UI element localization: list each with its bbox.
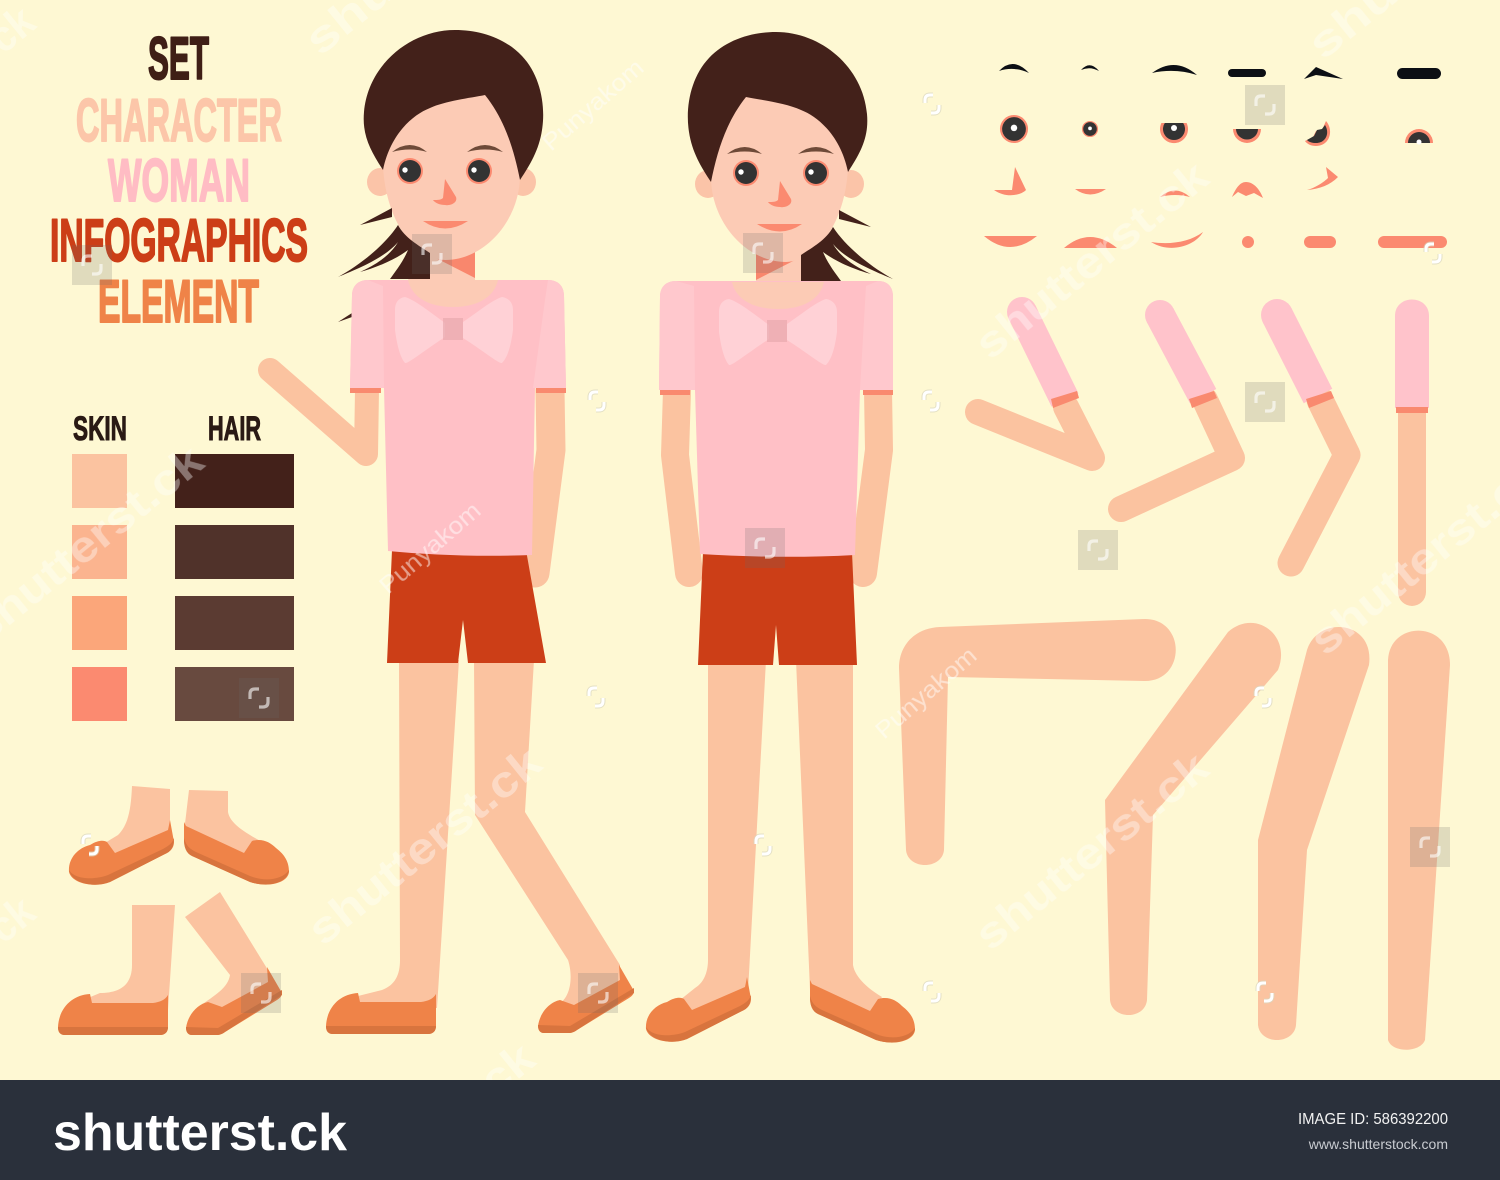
leg part diagonal (1105, 623, 1281, 1015)
face (392, 145, 503, 228)
title: INFOGRAPHICS (50, 207, 308, 274)
shirt (659, 281, 893, 557)
head (688, 32, 893, 324)
watermarks: Punyakom (374, 497, 486, 600)
title: ELEMENT (98, 268, 259, 335)
arm part 1 (978, 297, 1092, 458)
panel: hair swatches (175, 410, 294, 721)
footer logo: shutterst.ck (53, 1104, 347, 1162)
leg part straight (1388, 631, 1450, 1050)
watermarks: Punyakom (537, 54, 649, 157)
arm part 4 (1395, 300, 1429, 592)
title: WOMAN (108, 147, 250, 214)
footer bar (0, 1080, 1500, 1180)
title: CHARACTER (76, 87, 282, 154)
arms (675, 390, 879, 573)
legs (680, 660, 882, 1015)
eye parts (1000, 115, 1433, 146)
watermarks: shutterst.ck (965, 151, 1218, 369)
shorts (698, 552, 857, 665)
straight leg (358, 660, 459, 1008)
panel: skin swatches (72, 410, 127, 721)
watermarks: shutterst.ck (965, 742, 1218, 960)
figure: woman standing (646, 32, 915, 1043)
panel: skin swatches: SKIN (73, 410, 127, 448)
website: www.shutterstock.com (1308, 1136, 1448, 1152)
shorts (387, 550, 546, 663)
title: SET (148, 25, 209, 92)
eyebrow parts (999, 64, 1441, 79)
watermarks: shutterst.ck (298, 737, 551, 955)
title (50, 25, 308, 335)
bent leg (474, 660, 620, 1010)
leg part slanted (1258, 627, 1369, 1040)
head (338, 30, 543, 322)
shoe parts (58, 786, 289, 1035)
panel: hair swatches: HAIR (208, 410, 261, 448)
shoes (646, 977, 915, 1043)
shoes (326, 965, 634, 1034)
leg parts (899, 619, 1450, 1050)
arm part 2 (1121, 300, 1232, 509)
figure: woman walking (270, 30, 634, 1034)
watermarks: ck (470, 1033, 544, 1106)
watermarks: Punyakom (870, 642, 982, 745)
arm part 3 (1261, 299, 1347, 563)
shirt (350, 280, 566, 556)
face (727, 147, 834, 232)
arm parts (978, 297, 1429, 592)
lowered arm (535, 390, 551, 573)
nose parts (994, 167, 1338, 198)
image id: IMAGE ID: 586392200 (1298, 1111, 1448, 1128)
leg part bent horizontal (899, 619, 1176, 865)
mouth parts (984, 232, 1447, 248)
raised arm (270, 370, 367, 454)
